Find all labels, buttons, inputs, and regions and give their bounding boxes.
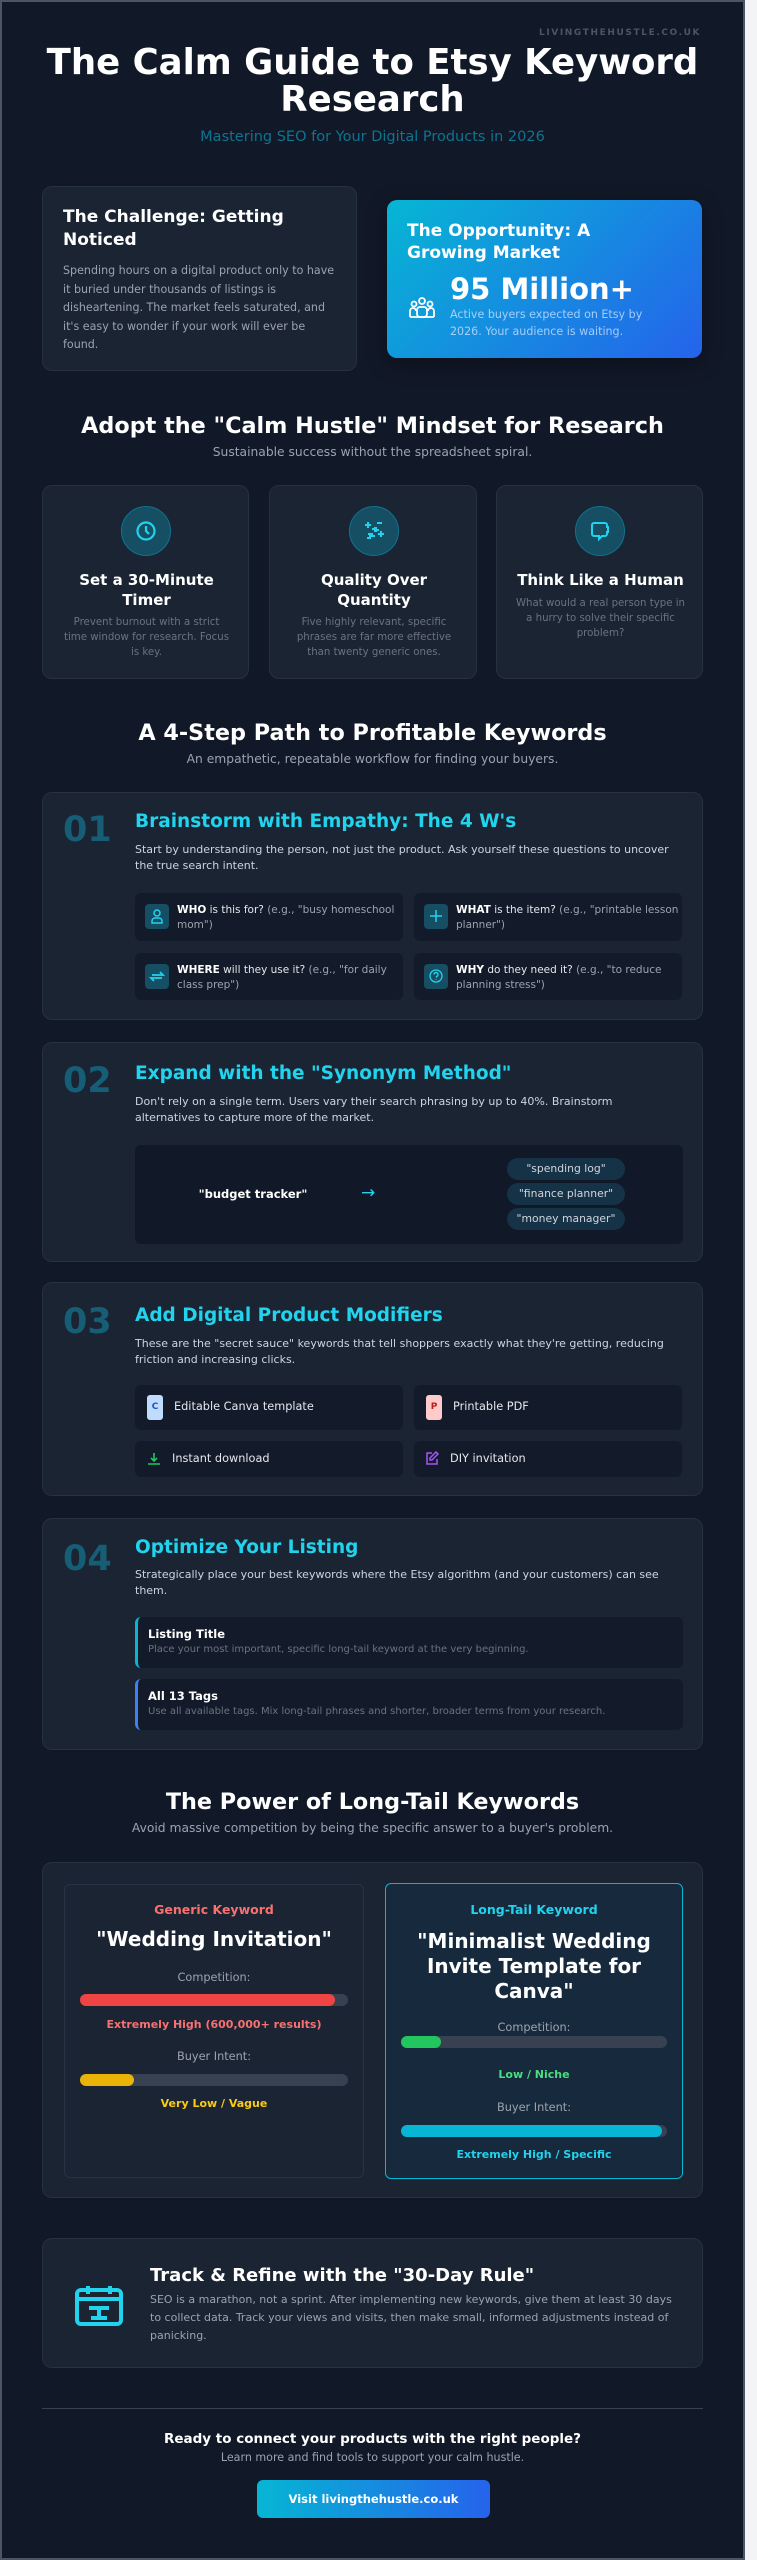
card text: phrases are far more effective — [297, 632, 451, 643]
challenge heading: The Challenge: Getting — [63, 207, 284, 227]
placement: title: Place your most important, specific long-tail keyword at the very beginning. — [148, 1644, 529, 1655]
item: where: class prep") — [177, 978, 239, 990]
opportunity heading: The Opportunity: A — [407, 221, 590, 241]
track text: to collect data. Track your views and visits, then make small, informed adjustments instead of — [150, 2311, 668, 2324]
modifier: diy: DIY invitation — [450, 1452, 526, 1465]
subheading: An empathetic, repeatable workflow for finding your buyers. — [187, 752, 558, 766]
step text: Don't rely on a single term. Users vary their search phrasing by up to 40%. Brainstorm — [135, 1095, 613, 1108]
card text — [516, 598, 685, 639]
card title: Timer — [122, 591, 171, 609]
heading: calm hustle: Adopt the "Calm Hustle" Mindset for Research — [81, 413, 664, 439]
track text: SEO is a marathon, not a sprint. After implementing new keywords, give them at least 30 days — [150, 2293, 672, 2306]
card text — [64, 617, 229, 658]
icon: person — [145, 904, 169, 929]
step title: Add Digital Product Modifiers — [135, 1305, 443, 1326]
column: generic keyword: "Wedding Invitation" — [96, 1927, 332, 1951]
stat caption: Active buyers expected on Etsy by — [450, 308, 642, 321]
panel: challenge — [42, 186, 357, 371]
card title — [321, 571, 427, 609]
modifier: pdf: P — [431, 1402, 437, 1412]
track text: panicking. — [150, 2329, 207, 2342]
opportunity heading — [407, 221, 590, 263]
step number 02: 02 — [63, 1061, 112, 1101]
column: long-tail keyword — [385, 1883, 683, 2179]
column: long-tail keyword: Competition: — [498, 2021, 570, 2034]
modifier: canva: C — [152, 1402, 158, 1412]
footer call to action: Ready to connect your products with the right people? — [164, 2431, 581, 2447]
subheading: Sustainable success without the spreadsheet spiral. — [213, 445, 532, 459]
stat: 95 million: 95 Million+ — [450, 272, 634, 306]
card title: Quality Over — [321, 571, 427, 589]
step number 01: 01 — [63, 810, 112, 850]
item: why — [414, 953, 682, 1000]
stat caption: 2026. Your audience is waiting. — [450, 325, 623, 338]
bar: intent low — [80, 2074, 348, 2086]
card title: Quantity — [337, 591, 411, 609]
item: who — [135, 893, 403, 941]
step text — [134, 1337, 664, 1366]
heading: 4-step: A 4-Step Path to Profitable Keywords — [138, 720, 607, 746]
modifier: pdf: Printable PDF — [453, 1400, 529, 1413]
item: what: WHAT is the item? (e.g., "printable lesson — [456, 904, 678, 916]
panel: timer — [42, 485, 249, 679]
step number 03: 03 — [63, 1302, 112, 1342]
icon: question — [424, 964, 448, 989]
card text: time window for research. Focus — [64, 632, 229, 643]
synonym pills: "finance planner" — [519, 1187, 613, 1200]
heading: long-tail: The Power of Long-Tail Keywords — [166, 1789, 579, 1815]
column: generic keyword: Competition: — [178, 1971, 250, 1984]
modifier: download: Instant download — [172, 1452, 270, 1465]
card title: Set a 30-Minute — [79, 571, 214, 589]
synonym pills — [507, 1158, 625, 1230]
card text: What would a real person type in — [516, 598, 685, 609]
seed keyword: "budget tracker" — [199, 1187, 307, 1201]
card title: Think Like a Human — [517, 571, 684, 589]
column: long-tail keyword: "Minimalist Wedding — [417, 1929, 651, 1953]
subheading: Avoid massive competition by being the specific answer to a buyer's problem. — [132, 1821, 613, 1835]
bar: competition low — [401, 2036, 667, 2048]
icon: plus — [424, 904, 448, 929]
step title: Brainstorm with Empathy: The 4 W's — [135, 811, 516, 832]
step text: friction and increasing clicks. — [135, 1353, 295, 1366]
opportunity heading: Growing Market — [407, 243, 560, 263]
icon: calendar — [75, 2286, 123, 2326]
panel: quality — [269, 485, 477, 679]
synonym diagram — [135, 1145, 683, 1244]
panel: 30-day rule — [42, 2238, 703, 2368]
challenge text — [63, 264, 334, 351]
bar: competition high — [80, 1994, 348, 2006]
item: who: mom") — [177, 918, 213, 930]
button: Visit livingthehustle.co.uk — [289, 2492, 458, 2506]
item: who: WHO is this for? (e.g., "busy homeschool — [177, 904, 394, 916]
card title — [79, 571, 214, 609]
synonym pills: "money manager" — [517, 1212, 615, 1225]
column: long-tail keyword: Canva" — [494, 1979, 574, 2003]
placement: tags: Use all available tags. Mix long-tail phrases and shorter, broader terms from your research. — [148, 1706, 605, 1717]
column: long-tail keyword: Extremely High / Specific — [456, 2148, 612, 2161]
placement: title — [135, 1617, 683, 1668]
step number 04: 04 — [63, 1539, 112, 1579]
track title: Track & Refine with the "30-Day Rule" — [150, 2265, 534, 2286]
card text: Five highly relevant, specific — [302, 617, 446, 628]
column: long-tail keyword: Buyer Intent: — [497, 2101, 571, 2114]
title — [46, 42, 698, 120]
challenge text: it's easy to wonder if your work will ever be — [63, 320, 305, 332]
step title: Expand with the "Synonym Method" — [135, 1063, 511, 1084]
modifier: canva: Editable Canva template — [174, 1400, 314, 1413]
icon: arrows — [145, 964, 169, 989]
modifier: download — [135, 1441, 403, 1477]
icon: sparkles — [349, 506, 399, 556]
panel: step 4 — [42, 1518, 703, 1750]
column: long-tail keyword: Low / Niche — [498, 2068, 570, 2081]
icon: chat — [575, 506, 625, 556]
column: long-tail keyword: Invite Template for — [427, 1954, 641, 1978]
item: why: planning stress") — [456, 978, 545, 990]
modifier: diy — [414, 1441, 682, 1477]
challenge text: Spending hours on a digital product only to have — [63, 264, 334, 277]
column: generic keyword: Extremely High (600,000+ results) — [106, 2018, 322, 2031]
title: Research — [280, 79, 465, 120]
brand tag: LIVINGTHEHUSTLE.CO.UK — [539, 28, 701, 38]
placement: title: Listing Title — [148, 1627, 225, 1641]
item: where — [135, 953, 403, 1000]
column: generic keyword — [64, 1884, 364, 2178]
panel: opportunity — [387, 200, 702, 358]
panel: step 1 — [42, 792, 703, 1020]
step text: the true search intent. — [135, 859, 259, 872]
item: what — [414, 893, 682, 941]
track text — [150, 2293, 672, 2342]
step text: them. — [135, 1584, 167, 1597]
subtitle: Mastering SEO for Your Digital Products in 2026 — [200, 129, 545, 145]
challenge heading — [63, 207, 284, 250]
item: where: WHERE will they use it? (e.g., "for daily — [177, 964, 387, 976]
step title: Optimize Your Listing — [135, 1537, 358, 1558]
modifier: pdf — [414, 1385, 682, 1430]
challenge text: disheartening. The market feels saturated, and — [63, 301, 325, 314]
button — [257, 2480, 490, 2518]
challenge text: found. — [63, 338, 98, 351]
card text: a hurry to solve their specific — [526, 613, 675, 624]
step text: These are the "secret sauce" keywords that tell shoppers exactly what they're getting, reducing — [135, 1337, 664, 1350]
step text: Start by understanding the person, not just the product. Ask yourself these questions to uncover — [135, 843, 669, 856]
panel: step 3 — [42, 1282, 703, 1496]
placement: tags: All 13 Tags — [148, 1689, 218, 1703]
step text — [135, 843, 669, 872]
step text — [135, 1568, 659, 1597]
panel: human — [496, 485, 703, 679]
column: generic keyword: Buyer Intent: — [177, 2050, 251, 2063]
card text — [297, 617, 451, 658]
icon: people — [409, 297, 435, 318]
item: why: WHY do they need it? (e.g., "to reduce — [456, 964, 661, 976]
stat caption — [450, 308, 642, 338]
challenge text: it buried under thousands of listings is — [63, 282, 276, 296]
synonym pills: "spending log" — [526, 1162, 606, 1175]
step text: alternatives to capture more of the market. — [135, 1111, 374, 1124]
step text: Strategically place your best keywords where the Etsy algorithm (and your customers) can see — [135, 1568, 659, 1581]
challenge heading: Noticed — [63, 230, 137, 250]
panel: comparison — [42, 1862, 703, 2198]
modifier: canva — [135, 1385, 403, 1430]
column: generic keyword: Very Low / Vague — [161, 2097, 267, 2110]
card text: than twenty generic ones. — [307, 647, 441, 658]
icon: clock — [121, 506, 171, 556]
arrow: → — [361, 1183, 375, 1203]
placement: tags — [135, 1679, 683, 1730]
card text: Prevent burnout with a strict — [74, 617, 219, 628]
panel: step 2 — [42, 1042, 703, 1262]
column: long-tail keyword: Long-Tail Keyword — [470, 1902, 598, 1917]
step text — [135, 1095, 613, 1124]
column: generic keyword: Generic Keyword — [154, 1902, 274, 1917]
card text: is key. — [131, 647, 162, 658]
bar: intent high — [401, 2125, 667, 2137]
footer subtext: Learn more and find tools to support your calm hustle. — [221, 2451, 524, 2464]
item: what: planner") — [456, 918, 505, 930]
card text: problem? — [577, 628, 624, 639]
title: The Calm Guide to Etsy Keyword — [47, 42, 698, 83]
